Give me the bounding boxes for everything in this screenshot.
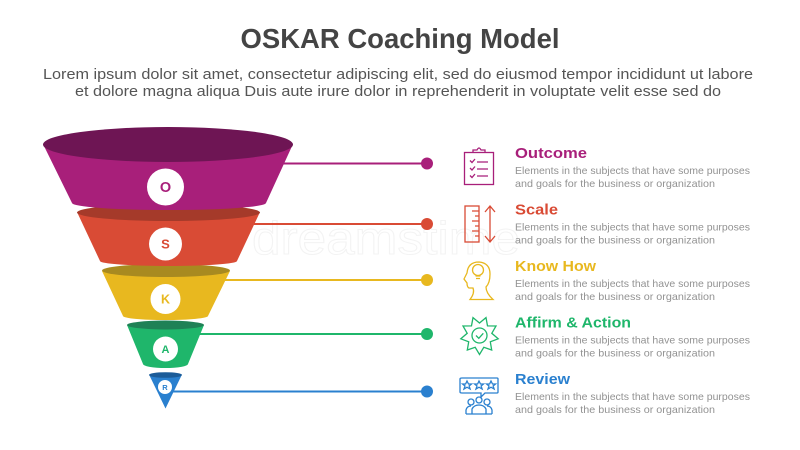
funnel segment: R: R [162,383,168,392]
funnel segment: A [127,320,204,368]
item: Scale [515,202,750,246]
connector: know how [224,274,433,286]
item: Review: and goals for the business or organization [515,404,715,416]
item: Know How: Know How [515,258,596,275]
item: Review [515,371,750,416]
item: Know How: and goals for the business or organization [515,291,715,303]
item: Outcome: Elements in the subjects that have some purposes [515,165,750,177]
connector: scale [254,218,433,230]
funnel segment: K: K [161,292,170,306]
funnel segment: S: S [161,236,170,252]
item: Outcome: and goals for the business or organization [515,178,715,190]
item: Affirm & Action [515,314,750,360]
item: Outcome [515,145,750,190]
icon: rating speech bubble and people [460,378,498,414]
item: Know How [515,258,750,303]
subtitle: Lorem ipsum dolor sit amet, consectetur adipiscing elit, sed do eiusmod tempor incididunt ut labore [43,66,753,83]
icon: badge with check [461,318,498,354]
icon: head with light bulb [464,262,493,300]
item: Scale: Elements in the subjects that have some purposes [515,222,750,234]
icon: clipboard checklist [464,148,494,184]
item: Scale: Scale [515,202,558,218]
subtitle: et dolore magna aliqua Duis aute irure dolor in reprehenderit in voluptate velit esse sed do [75,83,721,100]
item: Affirm & Action: Elements in the subjects that have some purposes [515,334,750,346]
subtitle [43,66,753,100]
funnel segment: O: O [160,180,171,196]
funnel segment: O [43,127,293,210]
connector: review [172,386,433,398]
item: Review: Elements in the subjects that have some purposes [515,391,750,403]
item: Outcome: Outcome [515,145,587,162]
title: OSKAR Coaching Model [240,23,560,54]
icon: ruler with arrow [465,206,495,242]
funnel segment: K [102,264,230,320]
watermark: dreamstime [252,212,520,264]
funnel segment: S [77,204,260,266]
funnel segment: R [149,372,182,408]
item: Review: Review [515,371,570,388]
item: Scale: and goals for the business or organization [515,234,715,246]
funnel segment: A: A [162,344,170,356]
connector: affirm and action [198,328,433,340]
connector: outcome [262,158,433,170]
item: Affirm & Action: Affirm & Action [515,314,631,332]
item: Affirm & Action: and goals for the business or organization [515,348,715,360]
item: Know How: Elements in the subjects that have some purposes [515,278,750,290]
